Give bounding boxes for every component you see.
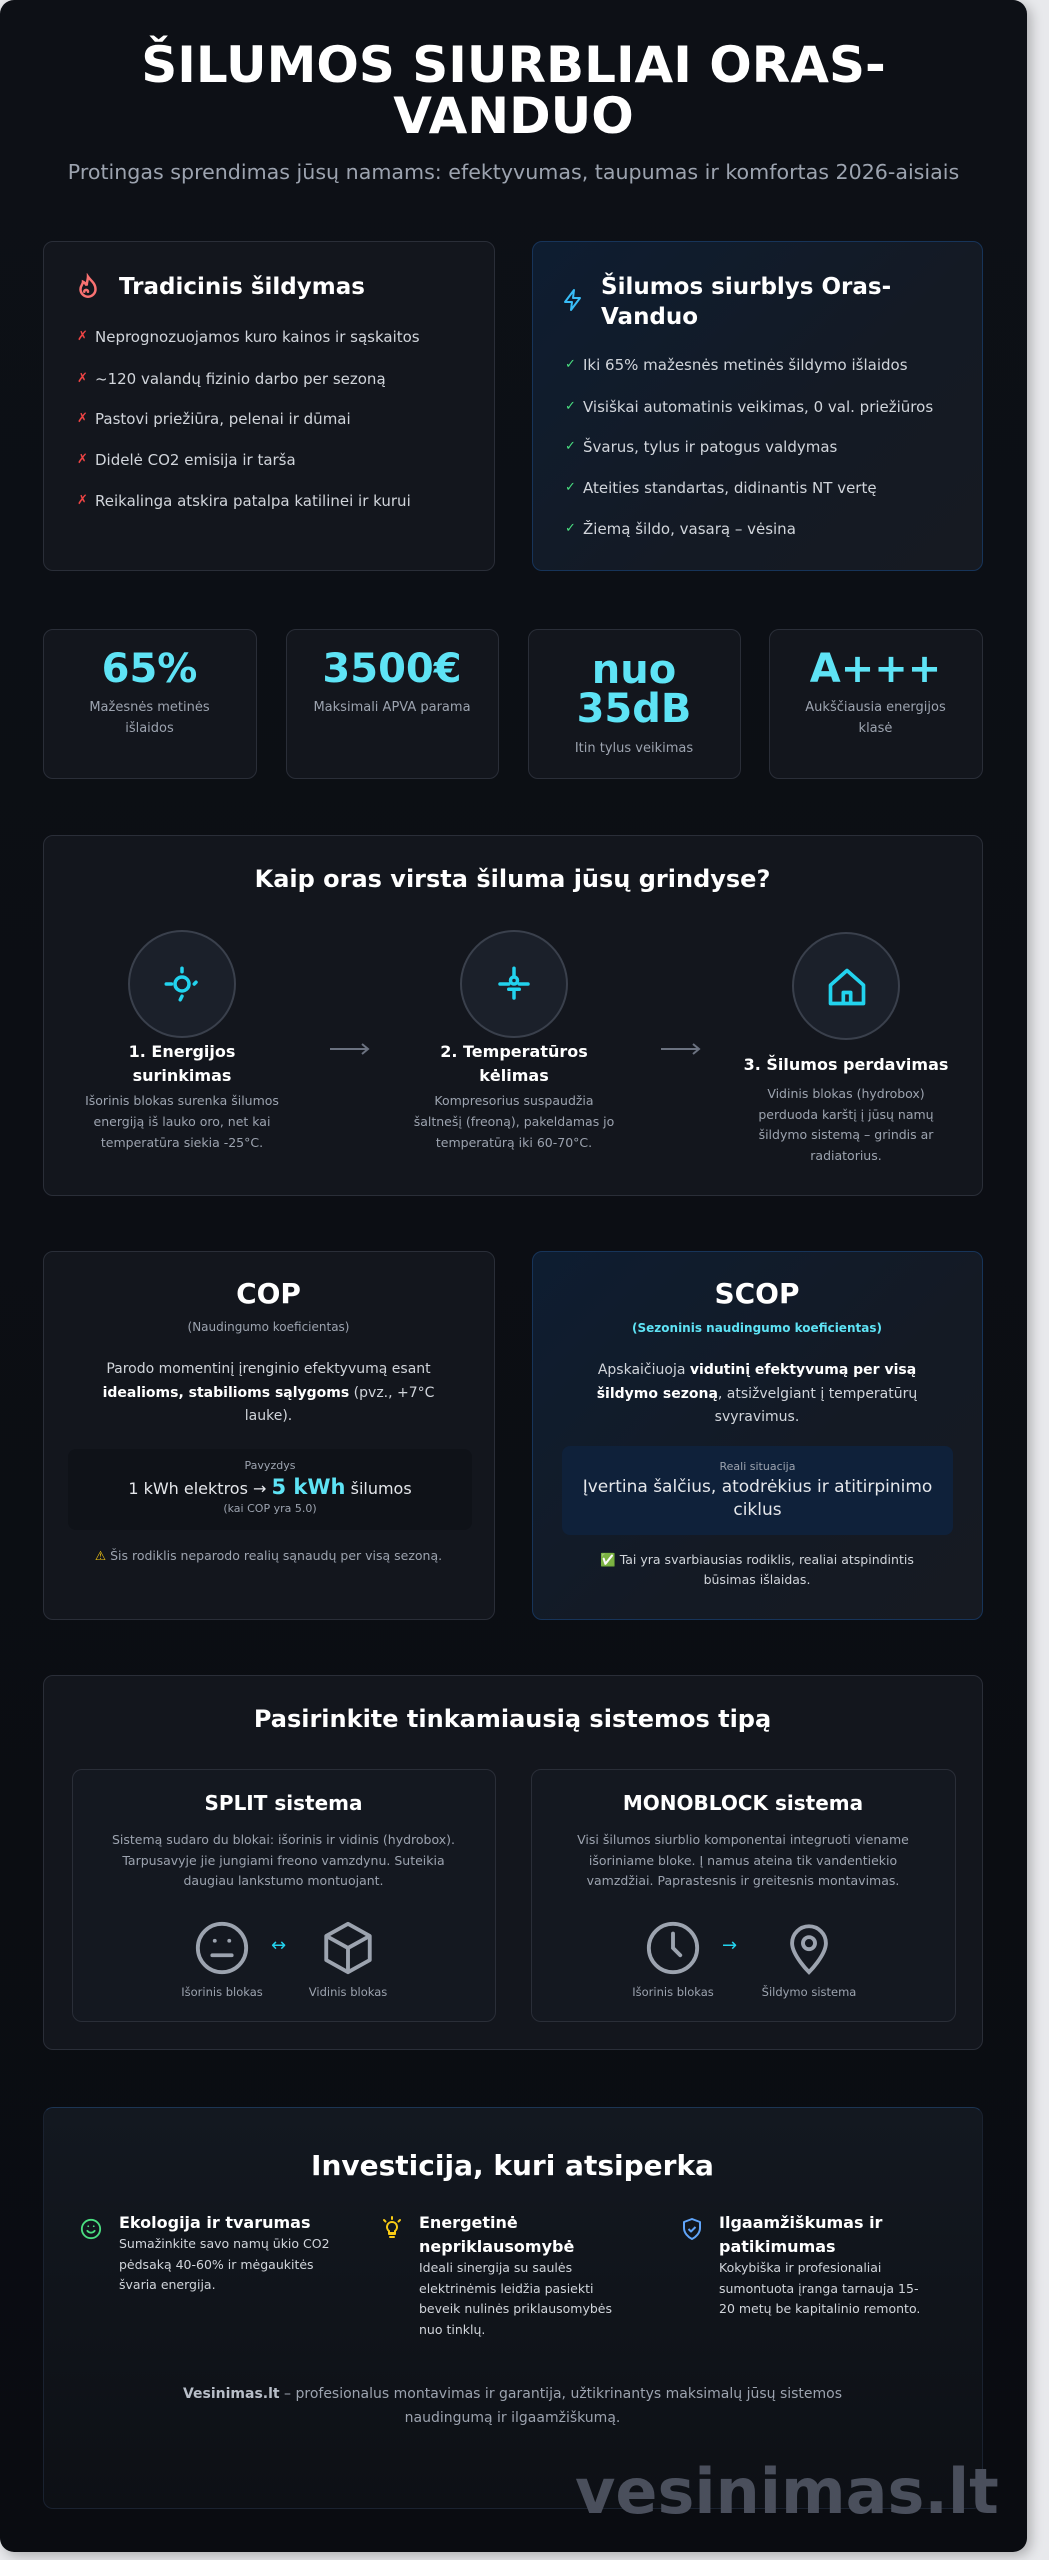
split card: Išorinis blokas xyxy=(181,1985,263,1999)
item: durability: Ilgaamžiškumas ir xyxy=(719,2213,882,2232)
text block: svyravimus. xyxy=(715,1409,799,1425)
step 3: radiatorius. xyxy=(810,1148,882,1163)
arrow xyxy=(330,1043,370,1055)
step 3: 3. Šilumos perdavimas xyxy=(744,1055,948,1074)
step 1: temperatūra siekia -25°C. xyxy=(101,1135,263,1150)
list: pros: ✓ xyxy=(565,439,576,454)
footer text: Vesinimas.lt – profesionalus montavimas ir garantija, užtikrinantys maksimalų jūsų sistemos xyxy=(183,2386,842,2402)
arrow: → xyxy=(722,1935,737,1956)
list: pros: ✓ xyxy=(565,521,576,536)
arrow xyxy=(661,1043,700,1055)
list: cons: Reikalinga atskira patalpa katilinei ir kurui xyxy=(95,492,411,510)
split card: SPLIT sistema xyxy=(204,1791,362,1815)
panel: COP: (Naudingumo koeficientas) xyxy=(188,1320,349,1334)
list: cons: ✗ xyxy=(77,371,88,386)
list: cons: Didelė CO2 emisija ir tarša xyxy=(95,451,296,469)
example box xyxy=(68,1449,472,1530)
item: energy independence: nepriklausomybė xyxy=(419,2237,574,2256)
stat: 3500€ xyxy=(286,629,499,779)
icon: zap xyxy=(564,289,581,311)
text block: Parodo momentinį įrenginio efektyvumą esant xyxy=(106,1361,431,1377)
stat: 35dB: nuo xyxy=(592,647,676,693)
panel: system type xyxy=(43,1675,983,2050)
step 1: surinkimas xyxy=(133,1066,231,1085)
item: durability: Kokybiška ir profesionaliai xyxy=(719,2260,881,2275)
list: cons xyxy=(77,328,420,510)
item: durability: 20 metų be kapitalinio remonto. xyxy=(719,2301,920,2316)
step 2: Kompresorius suspaudžia xyxy=(434,1093,594,1108)
monoblock card: Visi šilumos siurblio komponentai integruoti viename xyxy=(577,1832,909,1847)
monoblock card: MONOBLOCK sistema xyxy=(623,1791,863,1815)
real situation box: Reali situacija xyxy=(720,1460,795,1473)
list: cons: ✗ xyxy=(77,493,88,508)
title: ŠILUMOS SIURBLIAI ORAS- xyxy=(141,36,886,94)
item: energy independence xyxy=(383,2213,612,2336)
step 2: šaltnešį (freoną), pakeldamas jo xyxy=(414,1114,614,1129)
stat: 35dB: Itin tylus veikimas xyxy=(575,741,693,756)
heading: Šilumos siurblys Oras- xyxy=(601,274,891,300)
heading: SCOP xyxy=(714,1277,800,1310)
list: cons: ✗ xyxy=(77,411,88,426)
icon: outdoor unit xyxy=(196,1922,248,1974)
example box: (kai COP yra 5.0) xyxy=(223,1502,317,1515)
heading xyxy=(601,272,891,330)
real situation box: Įvertina šalčius, atodrėkius ir atitirpinimo xyxy=(583,1477,932,1497)
step 2: 2. Temperatūros xyxy=(440,1042,588,1061)
step 1 xyxy=(85,930,279,1150)
list: cons: ~120 valandų fizinio darbo per sezoną xyxy=(95,370,386,388)
list: cons: ✗ xyxy=(77,329,88,344)
stat: 35dB xyxy=(528,629,741,779)
panel: traditional heating xyxy=(43,241,495,571)
list: cons: ✗ xyxy=(77,452,88,467)
panel: heat pump xyxy=(532,241,983,571)
step 1: energiją iš lauko oro, net kai xyxy=(94,1114,270,1129)
monoblock card: išoriniame bloke. Į namus ateina tik vandentiekio xyxy=(589,1852,897,1868)
split card: daugiau lankstumo montuojant. xyxy=(183,1873,384,1888)
watermark: vesinimas.lt xyxy=(575,2455,999,2528)
panel: COP xyxy=(43,1251,495,1620)
item: ecology xyxy=(80,2213,330,2292)
text block: idealioms, stabilioms sąlygoms (pvz., +7°C xyxy=(103,1384,434,1400)
step 3 xyxy=(744,932,948,1163)
stat: A+++: Aukščiausia energijos xyxy=(805,700,946,715)
text block: lauke). xyxy=(245,1408,292,1424)
item: energy independence: Energetinė xyxy=(419,2213,518,2232)
panel: SCOP: (Sezoninis naudingumo koeficientas) xyxy=(632,1321,882,1335)
split card: Vidinis blokas xyxy=(309,1985,387,1999)
step 3: perduoda karštį į jūsų namų xyxy=(758,1107,934,1122)
text block: šildymo sezoną, atsižvelgiant į temperatūrų xyxy=(597,1386,917,1402)
list: cons: Neprognozuojamos kuro kainos ir sąskaitos xyxy=(95,328,420,346)
item: durability: patikimumas xyxy=(719,2237,836,2256)
stat: A+++: klasė xyxy=(859,721,892,736)
list: pros xyxy=(565,356,933,538)
heading: Investicija, kuri atsiperka xyxy=(311,2149,714,2182)
list: pros: ✓ xyxy=(565,399,576,414)
panel: SCOP xyxy=(532,1251,983,1620)
panel: how it works xyxy=(43,835,983,1196)
stat: A+++ xyxy=(769,629,983,779)
example box: 1 kWh elektros → 5 kWh šilumos xyxy=(128,1475,412,1499)
stat: 3500€: 3500€ xyxy=(322,646,462,692)
heading: Pasirinkite tinkamiausią sistemos tipą xyxy=(254,1705,771,1733)
arrow: ↔ xyxy=(271,1935,286,1956)
item: durability xyxy=(683,2213,920,2316)
item: energy independence: beveik nulinės priklausomybės xyxy=(419,2301,612,2316)
stat: 65%: išlaidos xyxy=(125,721,174,736)
title: VANDUO xyxy=(393,87,634,145)
heading: Kaip oras virsta šiluma jūsų grindyse? xyxy=(255,865,770,893)
stat: 65%: 65% xyxy=(102,646,197,692)
stat: 65%: Mažesnės metinės xyxy=(89,700,210,715)
step 1: 1. Energijos xyxy=(129,1042,235,1061)
step 2: kėlimas xyxy=(479,1066,549,1085)
item: energy independence: Ideali sinergija su saulės xyxy=(419,2260,572,2275)
subtitle: Protingas sprendimas jūsų namams: efektyvumas, taupumas ir komfortas 2026-aisiais xyxy=(68,160,959,184)
split card xyxy=(72,1769,496,2022)
example box: Pavyzdys xyxy=(245,1459,295,1472)
list: pros: Iki 65% mažesnės metinės šildymo išlaidos xyxy=(583,356,908,374)
icon: fan xyxy=(460,930,568,1038)
list: pros: Ateities standartas, didinantis NT vertę xyxy=(583,479,877,497)
step 2 xyxy=(414,930,614,1150)
monoblock card: vamzdžiai. Paprastesnis ir greitesnis montavimas. xyxy=(587,1873,899,1888)
heading: Vanduo xyxy=(601,304,698,330)
step 1: Išorinis blokas surenka šilumos xyxy=(85,1093,279,1108)
stat: 65% xyxy=(43,629,257,779)
note: būsimas išlaidas. xyxy=(704,1572,810,1587)
icon: clock xyxy=(646,1922,700,1974)
stat: 3500€: Maksimali APVA parama xyxy=(313,700,471,715)
warning: ⚠ Šis rodiklis neparodo realių sąnaudų per visą sezoną. xyxy=(95,1548,442,1563)
panel: investment xyxy=(43,2107,983,2509)
footer text xyxy=(183,2386,842,2426)
list: pros: Žiemą šildo, vasarą – vėsina xyxy=(583,520,796,538)
monoblock card xyxy=(531,1769,956,2022)
icon: house xyxy=(792,932,900,1040)
footer text: naudingumą ir ilgaamžiškumą. xyxy=(405,2410,620,2426)
list: pros: ✓ xyxy=(565,480,576,495)
heading: Tradicinis šildymas xyxy=(119,274,365,300)
list: pros: Švarus, tylus ir patogus valdymas xyxy=(583,438,837,456)
real situation box: ciklus xyxy=(733,1500,782,1520)
split card: Tarpusavyje jie jungiami freono vamzdynu. Suteikia xyxy=(122,1852,445,1868)
text block xyxy=(103,1361,434,1424)
note xyxy=(600,1552,914,1587)
item: durability: sumontuota įranga tarnauja 15- xyxy=(719,2280,918,2296)
item: energy independence: elektrinėmis leidžia pasiekti xyxy=(419,2280,593,2296)
item: ecology: pėdsaką 40-60% ir mėgaukitės xyxy=(119,2256,314,2272)
real situation box xyxy=(562,1446,953,1535)
title xyxy=(141,36,886,145)
icon: pin xyxy=(790,1924,828,1975)
heading: COP xyxy=(236,1277,301,1310)
note: ✅ Tai yra svarbiausias rodiklis, realiai atspindintis xyxy=(600,1552,914,1567)
list: cons: Pastovi priežiūra, pelenai ir dūmai xyxy=(95,410,351,428)
list: pros: Visiškai automatinis veikimas, 0 val. priežiūros xyxy=(583,398,933,416)
icon: flame xyxy=(79,273,97,298)
item: energy independence: nuo tinklų. xyxy=(419,2322,485,2336)
item: ecology: Ekologija ir tvarumas xyxy=(119,2213,310,2232)
monoblock card: Šildymo sistema xyxy=(762,1985,856,1999)
stat: 35dB: 35dB xyxy=(577,686,691,732)
split card: Sistemą sudaro du blokai: išorinis ir vidinis (hydrobox). xyxy=(112,1832,455,1847)
list: pros: ✓ xyxy=(565,357,576,372)
stat: A+++: A+++ xyxy=(810,646,941,692)
item: ecology: švaria energija. xyxy=(119,2277,216,2292)
step 3: šildymo sistemą – grindis ar xyxy=(759,1127,933,1142)
item: ecology: Sumažinkite savo namų ūkio CO2 xyxy=(119,2236,330,2251)
text block xyxy=(597,1362,917,1425)
step 2: temperatūrą iki 60-70°C. xyxy=(436,1135,592,1150)
icon: sun xyxy=(128,930,236,1038)
step 3: Vidinis blokas (hydrobox) xyxy=(767,1086,925,1101)
text block: Apskaičiuoja vidutinį efektyvumą per visą xyxy=(598,1362,916,1378)
monoblock card: Išorinis blokas xyxy=(632,1985,714,1999)
icon: box xyxy=(324,1922,372,1974)
